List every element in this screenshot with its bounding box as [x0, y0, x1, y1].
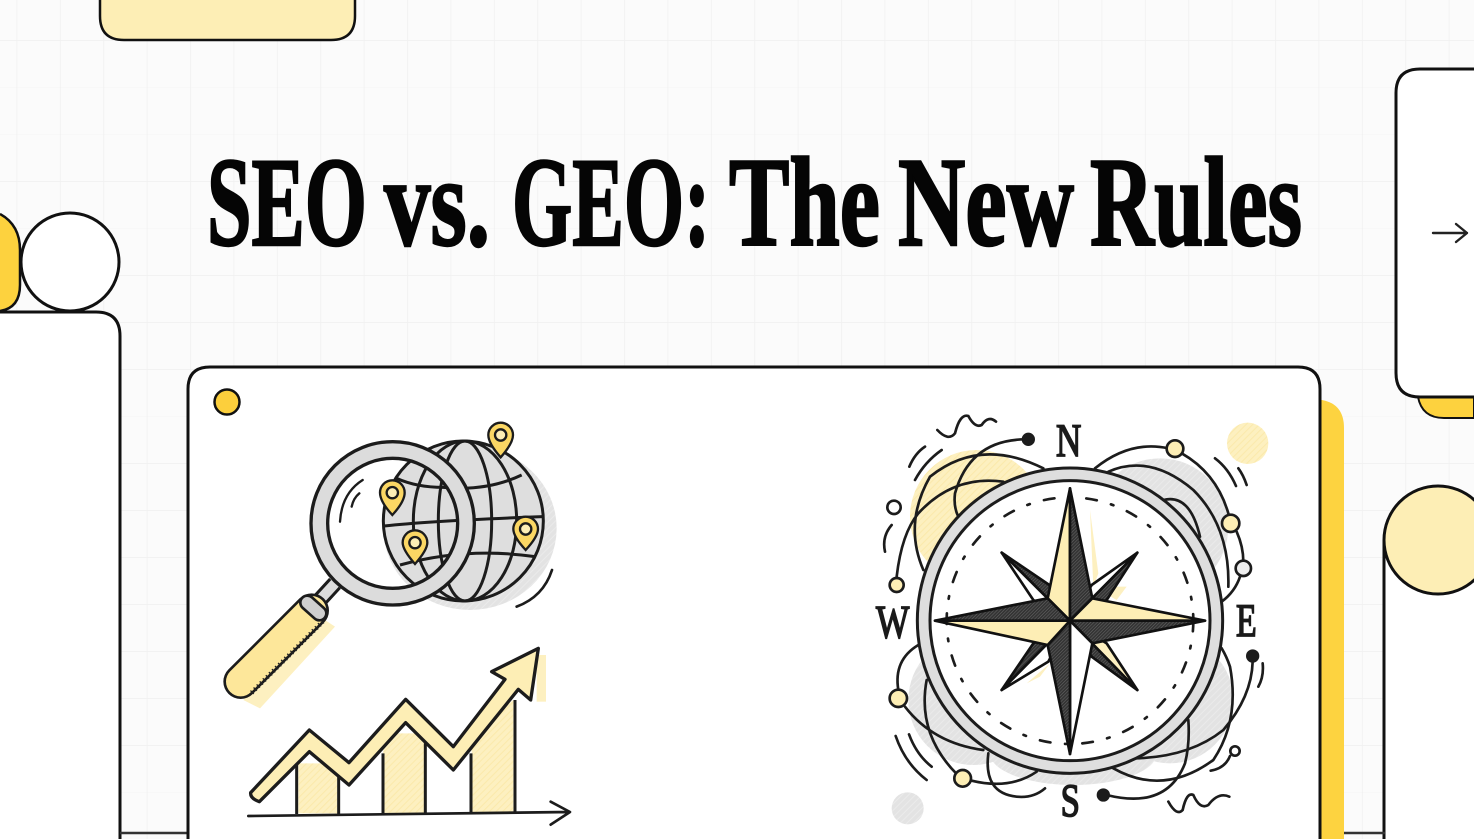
compass letters: S [1061, 775, 1080, 827]
title: The [729, 133, 880, 273]
compass letters: W [876, 596, 909, 648]
right card yellow backing [1418, 397, 1474, 418]
orbit lines [884, 416, 1263, 812]
bottom connector lines [120, 832, 1385, 834]
compass letters [876, 415, 1257, 827]
main points [1048, 488, 1070, 621]
icon: magnifier handle [241, 583, 335, 708]
lower right white card [1384, 540, 1474, 839]
yellow panel edge [1320, 400, 1344, 839]
compass letters: E [1236, 595, 1257, 647]
icon: right arrow [1433, 224, 1467, 242]
title [207, 133, 1302, 273]
left white circle [21, 213, 119, 311]
diagonal points [1002, 553, 1070, 621]
right white card with arrow [1396, 69, 1474, 397]
icon: magnifier ring [311, 442, 474, 605]
icon: map pins [380, 423, 538, 564]
globe shadow arc [517, 570, 552, 607]
compass background blobs [892, 423, 1268, 824]
left white card [0, 312, 120, 839]
compass letters: N [1056, 415, 1081, 467]
rising arrow [251, 648, 538, 802]
icon: globe [383, 441, 557, 610]
title: New [898, 133, 1074, 273]
panel dot [214, 390, 240, 414]
compass star [935, 488, 1205, 754]
lower right yellow circle [1384, 486, 1474, 594]
main panel [188, 367, 1320, 839]
illustration: SEO magnifier, globe and growth chart [241, 423, 570, 825]
title: SEO [207, 133, 367, 273]
compass ring [917, 468, 1223, 773]
illustration: GEO compass [876, 415, 1268, 827]
title: GEO: [512, 133, 710, 273]
left yellow tab [0, 214, 20, 311]
orbit nodes [887, 434, 1258, 800]
chart axis [248, 802, 570, 825]
bar chart with rising arrow [248, 648, 570, 825]
chart bars [297, 700, 515, 814]
title: vs. [384, 133, 490, 273]
top yellow tile [100, 0, 355, 40]
title: Rules [1090, 133, 1302, 273]
